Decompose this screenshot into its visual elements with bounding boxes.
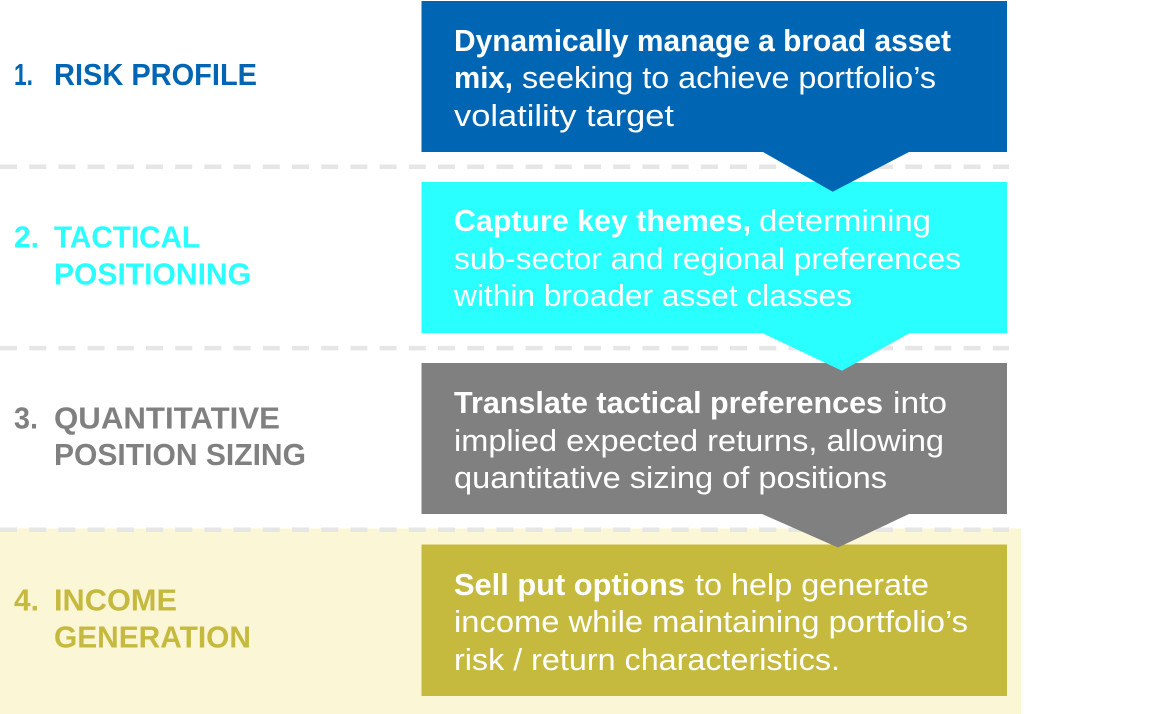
label: 3. quantitative position sizing [14, 400, 306, 472]
panel: box 4 income generation: income while maintaining portfolio’s [454, 604, 968, 639]
panel: box 4 income generation: risk / return characteristics. [454, 642, 840, 677]
panel: box 4 income generation: to help generate [695, 567, 929, 602]
label: 4. income generation: 4. [14, 582, 39, 618]
panel: box 2 tactical positioning [422, 182, 1007, 371]
panel: box 3 quantitative position sizing: into [893, 385, 947, 420]
panel: box 3 quantitative position sizing: quantitative sizing of positions [454, 460, 887, 495]
panel: box 1 risk profile: mix, [454, 60, 513, 95]
panel: box 4 income generation: Sell put options [454, 567, 685, 602]
label: 2. tactical positioning: POSITIONING [54, 256, 251, 292]
label: 2. tactical positioning: TACTICAL [54, 220, 200, 254]
label: 1. risk profile: RISK PROFILE [54, 57, 257, 92]
panel: box 1 risk profile [422, 1, 1007, 192]
label: 2. tactical positioning: 2. [14, 220, 39, 254]
income generation background band [0, 528, 1021, 714]
panel: box 1 risk profile: seeking to achieve portfolio’s [522, 60, 936, 95]
panel: box 2 tactical positioning: Capture key themes, [454, 203, 751, 238]
panel: box 2 tactical positioning: sub-sector and regional preferences [454, 241, 961, 276]
panel: box 4 income generation [422, 544, 1007, 696]
panel: box 1 risk profile: volatility target [454, 98, 674, 133]
label: 3. quantitative position sizing: QUANTITATIVE [54, 400, 280, 436]
panel: box 2 tactical positioning: within broader asset classes [453, 278, 852, 313]
panel: box 3 quantitative position sizing: Translate tactical preferences [454, 385, 883, 420]
label: 2. tactical positioning [14, 220, 251, 292]
label: 4. income generation: GENERATION [54, 620, 251, 654]
panel: box 3 quantitative position sizing: implied expected returns, allowing [454, 423, 944, 458]
label: 3. quantitative position sizing: POSITION SIZING [54, 437, 306, 472]
panel: box 1 risk profile: Dynamically manage a broad asset [454, 23, 951, 58]
panel: box 2 tactical positioning: determining [759, 203, 931, 238]
label: 4. income generation [14, 582, 251, 654]
label: 1. risk profile: 1. [14, 57, 33, 92]
label: 3. quantitative position sizing: 3. [14, 400, 38, 436]
panel: box 3 quantitative position sizing [422, 363, 1007, 548]
label: 4. income generation: INCOME [54, 582, 177, 618]
